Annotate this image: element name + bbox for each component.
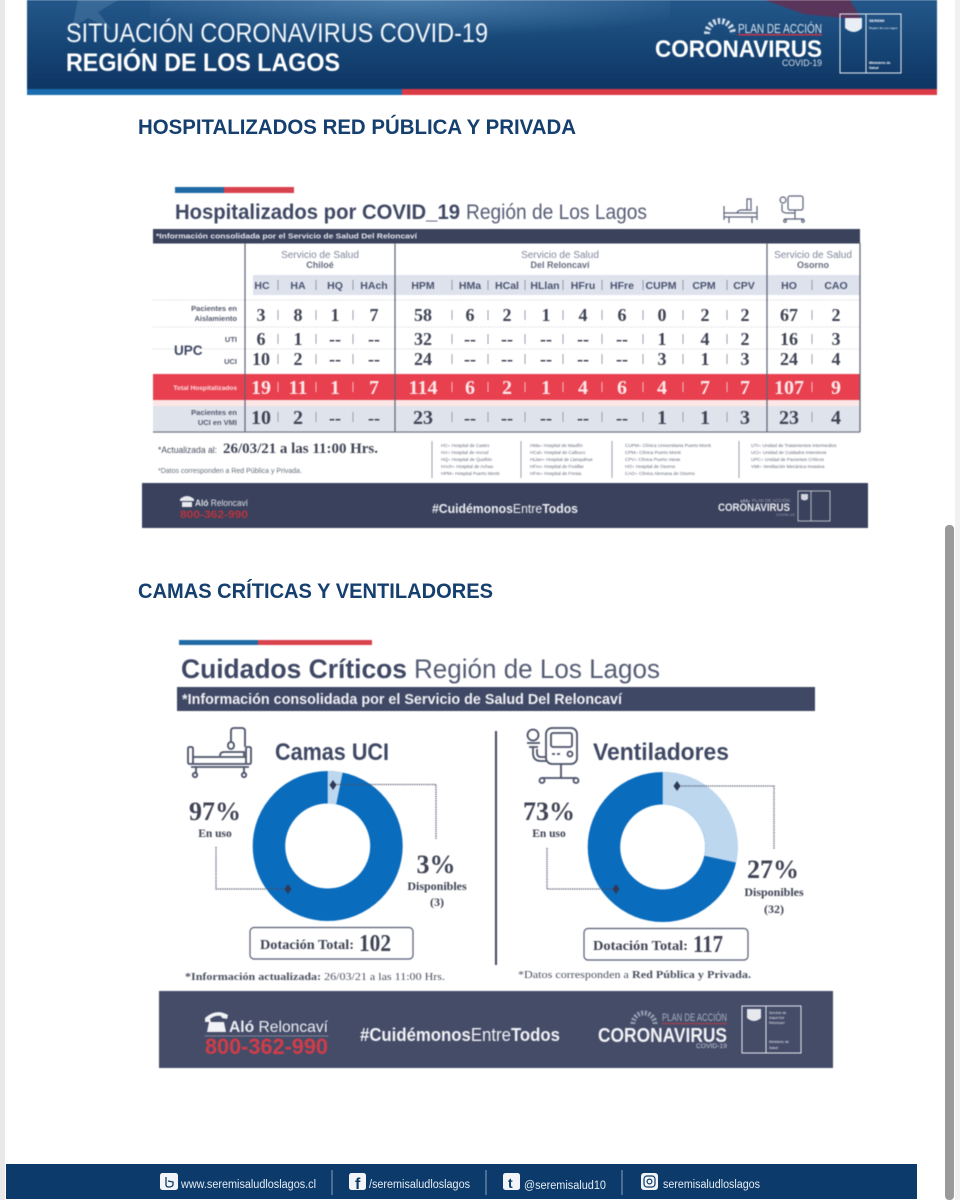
- table column header row: HFre: [610, 280, 634, 292]
- table footer banner: [142, 483, 868, 528]
- table column header row: CAO: [824, 280, 848, 292]
- update note: [158, 441, 378, 475]
- row: total hospitalizados: 6: [617, 377, 627, 399]
- legend: HPM= Hospital Puerto Montt: [441, 471, 500, 476]
- table service headers: Osorno: [797, 260, 829, 270]
- table footer banner: 800-362-990: [180, 509, 248, 521]
- legend: VMI= Ventilación Mecánica Invasiva: [751, 464, 825, 469]
- logo: plan de acción coronavirus: COVID-19: [696, 1044, 728, 1050]
- row: pacientes en aislamiento: 8: [294, 305, 302, 325]
- icon: facebook: [349, 1173, 366, 1193]
- row: total hospitalizados: 7: [700, 377, 710, 399]
- row: UCI en VMI: 23: [779, 407, 799, 429]
- panel color strip: [179, 640, 372, 645]
- update note: *Datos corresponden a Red Pública y Privada.: [158, 468, 302, 475]
- heading: camas críticas: CAMAS CRÍTICAS Y VENTILADORES: [138, 580, 493, 603]
- row: UTI: 16: [780, 329, 798, 349]
- logo: ministerio de salud: [742, 1006, 801, 1053]
- row: UCI en VMI: --: [501, 408, 513, 428]
- icon: hospital bed: [188, 728, 251, 777]
- row labels: UCI en VMI: [198, 418, 237, 427]
- box: dotación total camas: [250, 928, 413, 959]
- logo: plan de acción coronavirus: [598, 1011, 728, 1050]
- row: UCI en VMI: 1: [657, 407, 667, 429]
- row: total hospitalizados: 19: [251, 377, 271, 399]
- row: total hospitalizados: 1: [330, 377, 340, 399]
- legend: UCI= Unidad de Cuidados Intensivos: [751, 450, 827, 455]
- row: UCI en VMI: 2: [293, 407, 303, 429]
- icon: website: [160, 1173, 178, 1190]
- icon: instagram: [641, 1173, 658, 1190]
- table footer banner: PLAN DE ACCIÓN: [752, 497, 790, 503]
- logo: plan de acción coronavirus: PLAN DE ACCIÓN: [662, 1011, 727, 1024]
- row: pacientes en aislamiento: 2: [740, 305, 750, 325]
- row: UCI en VMI: 10: [251, 407, 271, 429]
- icon: telephone: [205, 1012, 228, 1032]
- header color strip: [27, 89, 937, 95]
- logo: ministerio de salud: Servicio de: [769, 1011, 786, 1015]
- legend: [432, 441, 837, 478]
- logo: plan de acción coronavirus: CORONAVIRUS: [598, 1025, 727, 1047]
- row: UCI: --: [368, 349, 380, 369]
- row: UCI: --: [464, 349, 476, 369]
- row: pacientes en aislamiento: 2: [502, 305, 512, 325]
- row: UCI en VMI: --: [329, 408, 341, 428]
- callout: 97% en uso: En uso: [198, 828, 232, 840]
- box: dotación total camas: 102: [359, 931, 391, 957]
- icon: twitter: t: [508, 1175, 513, 1191]
- callout: 27% disponibles: (32): [764, 902, 784, 916]
- logo: ministerio de salud: Reloncaví: [769, 1021, 785, 1025]
- logo: ministerio de salud: Ministerio de: [769, 1040, 789, 1044]
- row: UTI: --: [501, 329, 513, 349]
- row: UTI: 1: [658, 329, 666, 349]
- box: dotación total ventiladores: [584, 928, 748, 960]
- row labels: Aislamiento: [194, 314, 237, 323]
- legend: HQ= Hospital de Quellón: [441, 457, 492, 462]
- row: UCI en VMI: 1: [700, 407, 710, 429]
- row labels: UTI: [225, 335, 237, 344]
- table column header row: HAch: [360, 280, 388, 292]
- table column header row: CUPM: [646, 280, 677, 292]
- header logo: ministerio de salud: Salud: [869, 66, 879, 70]
- row: UTI: --: [540, 329, 552, 349]
- row labels: Pacientes en: [191, 304, 237, 313]
- header logo: ministerio de salud: [840, 14, 901, 73]
- row: UCI en VMI: --: [540, 408, 552, 428]
- row: UCI en VMI: --: [464, 408, 476, 428]
- table footer banner: #CuidémonosEntreTodos: [432, 501, 578, 516]
- row: total hospitalizados: 114: [409, 377, 437, 399]
- callout: 73% en uso: 73%: [523, 797, 575, 826]
- row: total hospitalizados: 1: [541, 377, 551, 399]
- panel footer banner: [159, 991, 833, 1068]
- icon: ventilator: [527, 728, 578, 783]
- row separators: [278, 310, 812, 422]
- table column header row: HMa: [459, 280, 481, 292]
- row: UTI: [256, 329, 840, 349]
- table color strip: [175, 187, 294, 193]
- row: UTI: 6: [256, 329, 266, 349]
- row: pacientes en aislamiento: 1: [542, 305, 550, 325]
- table info bar: [153, 229, 860, 244]
- text: instagram: seremisaludloslagos: [663, 1179, 760, 1191]
- row backgrounds: [153, 300, 860, 432]
- row: pacientes en aislamiento: [256, 305, 840, 325]
- header logo: plan de acción coronavirus: PLAN DE ACCIÓN: [738, 21, 822, 36]
- row: UTI: 32: [414, 329, 432, 349]
- label: camas UCI: Camas UCI: [275, 739, 389, 766]
- heading: hospitalizados: HOSPITALIZADOS RED PÚBLICA Y PRIVADA: [138, 115, 576, 139]
- table column header row: [253, 275, 860, 295]
- panel title: Cuidados Críticos: [181, 654, 407, 684]
- row: UCI en VMI: --: [368, 408, 380, 428]
- callout: 27% disponibles: [674, 781, 804, 916]
- donut chart: camas UCI: [269, 771, 386, 905]
- table column header row: CPV: [733, 280, 755, 292]
- legend: CPV= Clínica Puerto Varas: [625, 457, 681, 462]
- table column header row: HLlan: [530, 280, 560, 292]
- table column header row: HFru: [571, 280, 595, 292]
- legend: HFru= Hospital de Frutillar: [530, 464, 584, 469]
- row: UCI: --: [616, 349, 628, 369]
- row: UTI: 4: [700, 329, 710, 349]
- logo: ministerio de salud: Salud: [769, 1046, 778, 1050]
- table footer banner: CORONAVIRUS: [718, 502, 790, 514]
- icon: twitter: [503, 1173, 520, 1191]
- table column header row: CPM: [692, 280, 716, 292]
- row: total hospitalizados: 2: [502, 377, 512, 399]
- callout: 3% disponibles: (3): [430, 895, 444, 909]
- table column header row: HQ: [327, 280, 343, 292]
- legend: CUPM= Clínica Universitaria Puerto Montt: [625, 443, 712, 448]
- table column header row: HO: [781, 280, 797, 292]
- row: UCI: 24: [414, 349, 432, 369]
- legend: UTI= Unidad de Tratamientos Intermedios: [751, 443, 837, 448]
- callout: 97% en uso: 97%: [189, 797, 241, 826]
- table vertical rules: [245, 243, 860, 432]
- panel title: [181, 654, 660, 684]
- row: UTI: --: [577, 329, 589, 349]
- legend: HA= Hospital de Ancud: [441, 450, 489, 455]
- row: total hospitalizados: 9: [831, 377, 841, 399]
- row: UCI: 4: [832, 349, 840, 369]
- row: pacientes en aislamiento: 1: [330, 305, 340, 325]
- callout: 73% en uso: En uso: [532, 828, 566, 840]
- row: UTI: --: [329, 329, 341, 349]
- legend: CAO= Clínica Alemana de Osorno: [625, 471, 695, 476]
- page footer bar: [6, 1164, 917, 1199]
- row: total hospitalizados: 4: [657, 377, 667, 399]
- row: UCI: --: [329, 349, 341, 369]
- legend: UPC= Unidad de Pacientes Críticos: [751, 457, 825, 462]
- row: UCI en VMI: 3: [740, 407, 750, 429]
- row: UCI en VMI: --: [616, 408, 628, 428]
- update note: 26/03/21 a las 11:00 Hrs.: [223, 441, 378, 457]
- panel: hospitalizados table: [142, 187, 868, 528]
- row labels: UCI: [224, 357, 237, 366]
- callout: 27% disponibles: Disponibles: [744, 885, 804, 899]
- row: pacientes en aislamiento: 4: [578, 305, 588, 325]
- legend: HMa= Hospital de Maullín: [530, 443, 583, 448]
- box: dotación total camas: Dotación Total:: [260, 938, 354, 953]
- panel info bar: *Información consolidada por el Servicio de Salud Del Reloncaví: [182, 691, 623, 708]
- table service headers: [281, 250, 852, 270]
- row: UCI en VMI: 23: [413, 407, 433, 429]
- note: información actualizada: *Información actualizada: 26/03/21 a las 11:00 Hrs.: [185, 971, 445, 983]
- row: UCI: 3: [740, 349, 750, 369]
- legend: CPM= Clínica Puerto Montt: [625, 450, 682, 455]
- header logo: ministerio de salud: Región de Los Lagos: [869, 26, 898, 30]
- note: datos corresponden: *Datos corresponden a Red Pública y Privada.: [518, 969, 751, 981]
- row: UCI: 24: [780, 349, 798, 369]
- row: UCI: 3: [658, 349, 666, 369]
- row: pacientes en aislamiento: 6: [618, 305, 626, 325]
- row: pacientes en aislamiento: 2: [832, 305, 840, 325]
- callout: 3% disponibles: 3%: [416, 850, 456, 879]
- table service headers: Del Reloncaví: [530, 260, 590, 270]
- table service headers: Chiloé: [306, 260, 334, 270]
- table service headers: Servicio de Salud: [281, 250, 359, 261]
- header title: REGIÓN DE LOS LAGOS: [66, 47, 340, 77]
- text: website: www.seremisaludloslagos.cl: [180, 1179, 316, 1191]
- text: phone number: 800-362-990: [205, 1034, 328, 1059]
- row: UTI: 3: [832, 329, 840, 349]
- legend: HO= Hospital de Osorno: [625, 464, 676, 469]
- update note: *Actualizada al:: [158, 445, 217, 455]
- row: total hospitalizados: 107: [774, 377, 804, 399]
- table title: Región de Los Lagos: [466, 201, 647, 224]
- row: pacientes en aislamiento: 3: [256, 305, 266, 325]
- table title: [175, 201, 647, 224]
- row: total hospitalizados: 6: [465, 377, 475, 399]
- row: total hospitalizados: 7: [740, 377, 750, 399]
- row: total hospitalizados: 11: [289, 377, 307, 399]
- row: UCI: 10: [252, 349, 270, 369]
- table title: Hospitalizados por COVID_19: [175, 201, 460, 224]
- row: pacientes en aislamiento: 6: [466, 305, 474, 325]
- table info bar: *Información consolidada por el Servicio de Salud Del Reloncaví: [156, 232, 418, 240]
- callout: 27% disponibles: 27%: [747, 855, 799, 884]
- divider: [495, 731, 497, 965]
- callout: 97% en uso: [189, 797, 292, 894]
- row: UTI: --: [464, 329, 476, 349]
- box: dotación total ventiladores: Dotación Total:: [593, 939, 688, 954]
- text: hashtag: #CuidémonosEntreTodos: [360, 1025, 560, 1045]
- row labels: [173, 304, 237, 427]
- row: pacientes en aislamiento: 7: [370, 305, 378, 325]
- donut chart: ventiladores: [604, 772, 738, 906]
- icon: facebook: f: [355, 1176, 361, 1193]
- panel: cuidados críticos: [159, 640, 833, 1068]
- legend: HC= Hospital de Castro: [441, 443, 490, 448]
- row labels: UPC: [174, 343, 203, 358]
- icon: ventilator small: [780, 196, 804, 222]
- row: total hospitalizados: 4: [578, 377, 588, 399]
- header logo: ministerio de salud: SEREMI: [869, 18, 884, 23]
- table column header row: HA: [290, 280, 306, 292]
- table service headers: Servicio de Salud: [774, 250, 852, 261]
- callout: 3% disponibles: Disponibles: [407, 879, 467, 893]
- header title: [66, 17, 488, 77]
- header logo: plan de acción coronavirus: [655, 21, 822, 68]
- text: aló reloncaví: Aló Reloncaví: [229, 1019, 329, 1036]
- row: UCI: 2: [294, 349, 302, 369]
- row: UTI: --: [368, 329, 380, 349]
- row: UCI en VMI: [251, 407, 841, 429]
- table service headers: Servicio de Salud: [521, 250, 599, 261]
- panel title: Región de Los Lagos: [414, 654, 660, 684]
- row: total hospitalizados: [251, 377, 841, 399]
- table column header row: HCal: [495, 280, 519, 292]
- row: UCI: 1: [700, 349, 710, 369]
- row: UTI: 2: [740, 329, 750, 349]
- header logo: plan de acción coronavirus: COVID-19: [782, 58, 822, 68]
- legend: HFre= Hospital de Fresia: [530, 471, 582, 476]
- row: pacientes en aislamiento: 2: [700, 305, 710, 325]
- row: pacientes en aislamiento: 58: [414, 305, 432, 325]
- callout: 73% en uso: [523, 797, 620, 894]
- row: total hospitalizados: 7: [369, 377, 379, 399]
- row labels: Pacientes en: [191, 408, 237, 417]
- header logo: ministerio de salud: Ministerio de: [869, 61, 891, 65]
- header logo: plan de acción coronavirus: CORONAVIRUS: [655, 36, 822, 63]
- box: dotación total ventiladores: 117: [693, 932, 723, 958]
- header banner: [27, 0, 937, 95]
- legend: HCal= Hospital de Calbuco: [530, 450, 586, 455]
- logo: ministerio de salud: Salud Del: [769, 1016, 784, 1020]
- row: UCI: --: [540, 349, 552, 369]
- table footer banner: Aló Reloncaví: [195, 498, 248, 508]
- row labels: Total Hospitalizados: [173, 385, 237, 392]
- callout: 3% disponibles: [330, 780, 467, 909]
- row: UCI en VMI: 4: [831, 407, 841, 429]
- table column header row: HPM: [411, 280, 435, 292]
- row: pacientes en aislamiento: 67: [780, 305, 798, 325]
- text: facebook: /seremisaludloslagos: [369, 1179, 470, 1191]
- row: UCI: --: [577, 349, 589, 369]
- row: pacientes en aislamiento: 0: [658, 305, 666, 325]
- legend: HAch= Hospital de Achao: [441, 464, 494, 469]
- row: UCI en VMI: --: [577, 408, 589, 428]
- row: UTI: --: [616, 329, 628, 349]
- row: UCI: --: [501, 349, 513, 369]
- panel info bar: [177, 687, 815, 711]
- label: ventiladores: Ventiladores: [593, 739, 729, 766]
- table footer banner: COVID-19: [776, 512, 795, 517]
- legend: HLlan= Hospital de Llanquihue: [530, 457, 593, 462]
- icon: bed small: [724, 199, 757, 223]
- row: UTI: 1: [294, 329, 302, 349]
- text: twitter: @seremisalud10: [524, 1180, 606, 1192]
- row: UCI: [252, 349, 840, 369]
- header title: SITUACIÓN CORONAVIRUS COVID-19: [66, 17, 488, 48]
- table column header row: HC: [254, 280, 270, 292]
- scrollbar: [945, 525, 954, 1200]
